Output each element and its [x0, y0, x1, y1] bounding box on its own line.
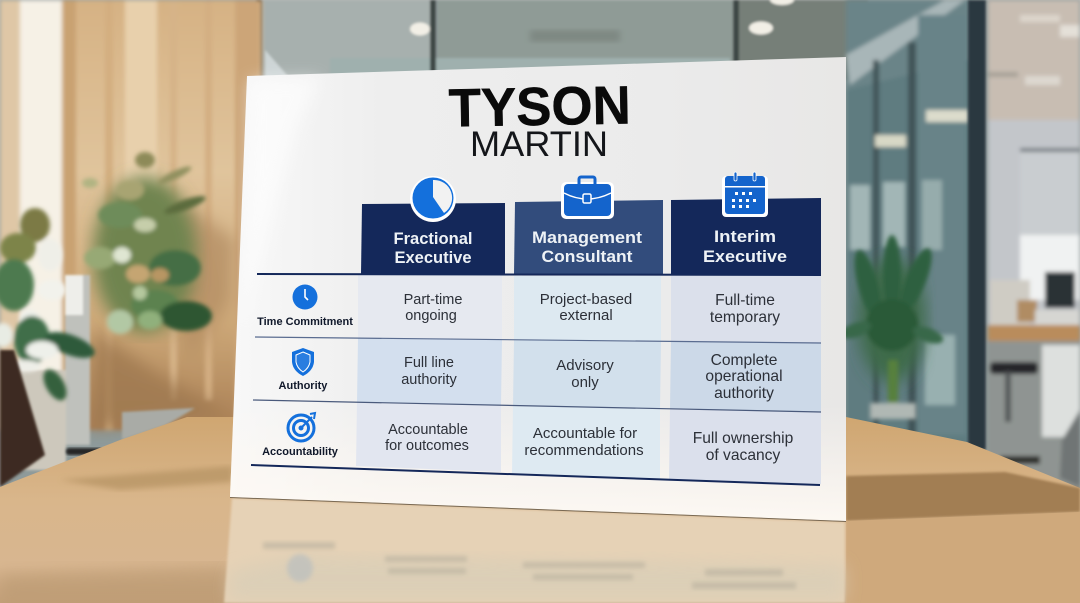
row label: Authority — [279, 348, 328, 392]
sign bottom edge — [230, 497, 846, 522]
background: glass partition right — [846, 0, 971, 450]
header: Management Consultant — [514, 200, 663, 274]
cells: Fractional Executive: Accountable — [388, 422, 468, 438]
header: Fractional Executive: Executive — [394, 249, 472, 267]
cells: Management Consultant: Project-based — [540, 291, 632, 308]
cells: Interim Executive: temporary — [710, 309, 780, 326]
cells: Interim Executive: Complete — [711, 352, 777, 369]
background: chair — [0, 350, 45, 487]
table rules — [251, 274, 821, 485]
header: Fractional Executive: Fractional — [394, 230, 472, 248]
cells: Fractional Executive: for outcomes — [385, 438, 469, 454]
cells: Fractional Executive: authority — [401, 372, 458, 388]
cells: Management Consultant: Accountable for — [533, 425, 637, 442]
cells: Interim Executive: Full ownership — [693, 430, 794, 447]
cells: Interim Executive: Full-time — [715, 292, 775, 309]
header: Interim Executive: Interim — [714, 228, 776, 246]
cells: Fractional Executive — [385, 292, 469, 454]
cells: Fractional Executive: ongoing — [405, 308, 457, 324]
title: logo: MARTIN — [470, 125, 608, 164]
cells: Management Consultant: recommendations — [524, 442, 644, 459]
sign board — [230, 57, 846, 522]
row label: Time Commitment: Time Commitment — [257, 316, 353, 328]
cells: Interim Executive: authority — [714, 385, 774, 402]
header: Management Consultant: Consultant — [542, 248, 633, 266]
header: Interim Executive — [671, 198, 821, 275]
cells: Interim Executive: of vacancy — [706, 447, 780, 464]
cells: Management Consultant — [524, 291, 644, 459]
background: plant on wood wall — [82, 152, 212, 334]
cells: Management Consultant: Advisory — [556, 357, 614, 374]
background: plant right — [839, 235, 945, 419]
row label: Accountability — [262, 413, 339, 458]
cells: Management Consultant: only — [571, 374, 599, 391]
cells: Fractional Executive: Full line — [404, 355, 454, 371]
header: Management Consultant: Management — [532, 229, 643, 247]
row label: Accountability: Accountability — [262, 446, 339, 458]
background: chair base — [66, 448, 106, 455]
background: window and wood wall — [0, 0, 262, 430]
cells: Fractional Executive: Part-time — [404, 292, 462, 308]
column tints — [356, 275, 821, 484]
row label: Time Commitment — [257, 284, 353, 328]
title: logo: TYSON — [448, 75, 631, 139]
header: Fractional Executive — [361, 203, 505, 274]
row label: Authority: Authority — [279, 380, 328, 392]
background: column and pot — [20, 275, 195, 470]
background: table — [0, 417, 1080, 603]
background: plant left — [0, 208, 98, 404]
icon: calendar — [722, 172, 768, 217]
icon: briefcase — [561, 177, 614, 219]
cells: Management Consultant: external — [559, 307, 613, 324]
background: open office right — [988, 0, 1080, 494]
cells: Interim Executive: operational — [705, 368, 783, 385]
cells: Interim Executive — [693, 292, 794, 464]
background: dark column — [968, 0, 986, 450]
icon: pie clock — [410, 176, 456, 222]
header: Interim Executive: Executive — [703, 248, 787, 266]
sign reflection on table — [263, 542, 796, 589]
